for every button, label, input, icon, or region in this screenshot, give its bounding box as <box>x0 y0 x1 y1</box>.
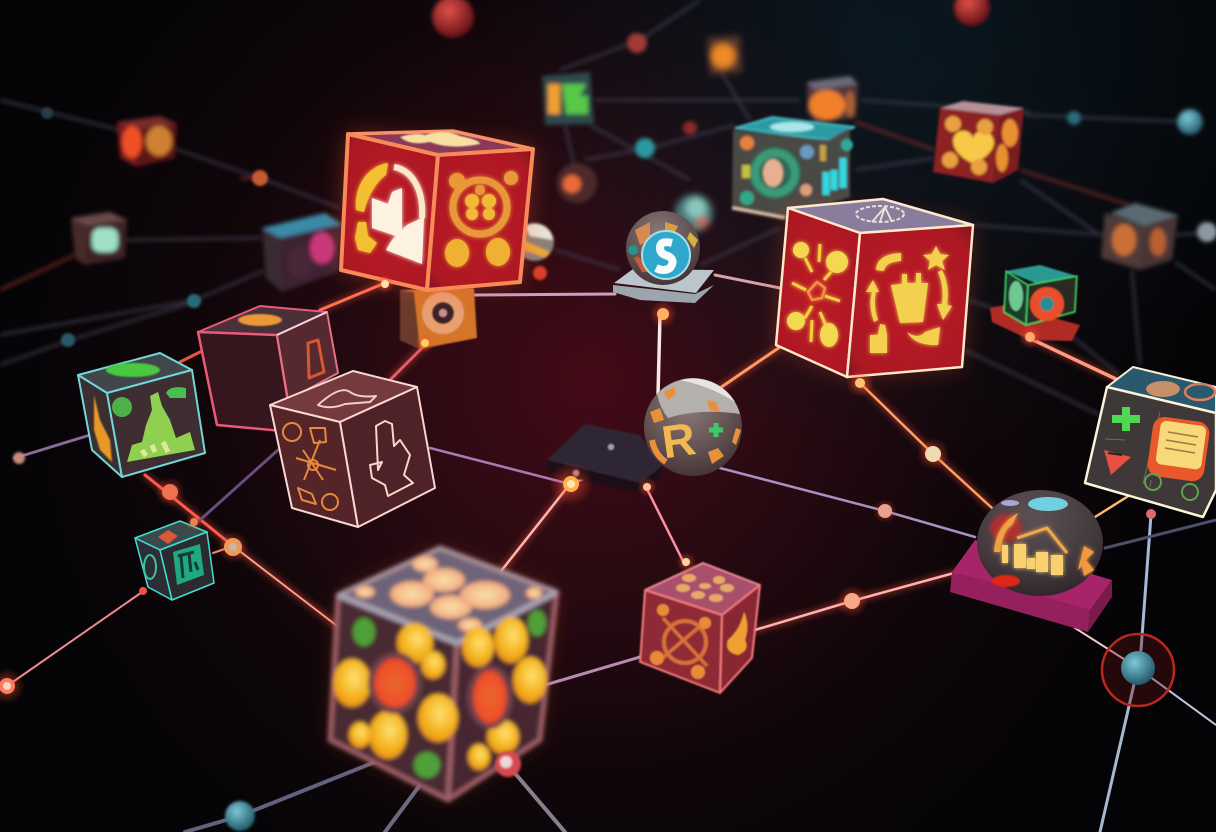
base <box>950 572 1090 632</box>
left face <box>330 595 457 800</box>
sphere: on grey pedestal <box>613 211 714 303</box>
cube: small green on red base <box>990 265 1080 341</box>
node: lower cube red ball <box>495 751 521 777</box>
cube: grey-red with hand icon <box>270 371 435 527</box>
node: small orange by teal cube <box>185 513 203 531</box>
distant sphere: pale behind big cube <box>516 223 554 280</box>
icon: network glyph <box>283 423 338 510</box>
distant cube: grey left <box>71 212 127 265</box>
distant cube: orange under big red cube <box>400 288 477 349</box>
cube: large red right <box>776 199 973 377</box>
icon: network hub <box>787 242 848 347</box>
left face <box>341 134 438 290</box>
cube: red hearts <box>933 101 1024 183</box>
cube: green pyramid <box>78 353 205 477</box>
distant cube: small orange top <box>807 76 858 123</box>
line glow layer <box>145 283 1118 632</box>
glow <box>341 134 533 290</box>
right face <box>847 225 973 377</box>
node: left grey <box>13 452 25 464</box>
icon: gear flower <box>445 171 518 267</box>
node: blurred teal left <box>41 107 201 347</box>
icon: green pyramid <box>127 392 195 462</box>
cube: large red with thumb icon <box>341 131 533 290</box>
glow <box>330 548 557 800</box>
icon: thumb <box>355 163 424 264</box>
cube: small red flower <box>640 563 760 693</box>
glowing connection lines <box>7 275 1216 832</box>
sphere: dome on magenta base <box>950 490 1112 632</box>
node: blurred orange upper left <box>252 170 268 186</box>
node: left orange <box>217 531 249 563</box>
right face <box>448 592 557 800</box>
sphere: letter R <box>644 378 742 476</box>
dome <box>977 490 1103 596</box>
top face <box>348 131 533 155</box>
node: bright orange centre <box>549 462 593 506</box>
letter: R <box>659 412 699 468</box>
ovals: left face <box>333 623 458 759</box>
orb <box>626 211 700 285</box>
node: right cube link <box>1018 325 1042 349</box>
ovals: top face <box>355 556 542 632</box>
node: small on vertical right line <box>1146 509 1156 519</box>
node: bottom teal <box>225 801 255 831</box>
node: red cube corner <box>846 369 874 397</box>
distant cube: green top <box>542 72 594 125</box>
node: pink on lower line <box>836 585 868 617</box>
line core layer <box>7 275 1216 832</box>
node: pale under big cube <box>375 274 395 294</box>
node: left red <box>155 477 185 507</box>
node: left red edge <box>0 668 25 704</box>
icon: bag with arrows <box>866 246 952 353</box>
pale cap <box>657 378 740 418</box>
cube: grey right distant <box>1101 203 1178 270</box>
distant cube: red top-left <box>117 116 177 167</box>
distant network lines <box>0 0 1216 415</box>
node: pink on purple line <box>873 499 897 523</box>
node: teal with red ring <box>1102 634 1174 706</box>
cube: right edge document <box>1085 367 1216 517</box>
top face <box>338 548 557 643</box>
node: small pink <box>637 477 657 497</box>
glow <box>776 208 973 377</box>
right face <box>427 149 533 290</box>
distant balls: red at top <box>432 0 990 53</box>
distant sphere: small red <box>557 163 597 203</box>
node: small under big cube <box>415 333 435 353</box>
icon: hand <box>370 421 413 496</box>
cube: small teal <box>135 521 214 600</box>
node: pale right of red cube <box>917 438 949 470</box>
top face <box>788 199 973 233</box>
distant cube: orange top <box>707 35 742 75</box>
cube: dark maroon left <box>198 306 338 432</box>
distant sphere: teal <box>675 194 713 232</box>
distant cube: multicolour <box>262 213 342 292</box>
left face <box>776 208 860 377</box>
node: small at cube base <box>676 552 696 572</box>
dim red top lines <box>0 122 1130 290</box>
pedestal <box>613 285 714 303</box>
distant balls: teal at the right <box>635 109 1216 242</box>
plate: dark slab <box>547 424 662 494</box>
node: small orange under pedestal <box>649 300 677 328</box>
cube: large foreground with yellow ovals <box>330 548 557 800</box>
icon: house and bars <box>994 513 1094 576</box>
node: red by teal cube <box>139 587 147 595</box>
cube: teal dial <box>732 117 855 218</box>
ovals: right face <box>462 617 547 770</box>
